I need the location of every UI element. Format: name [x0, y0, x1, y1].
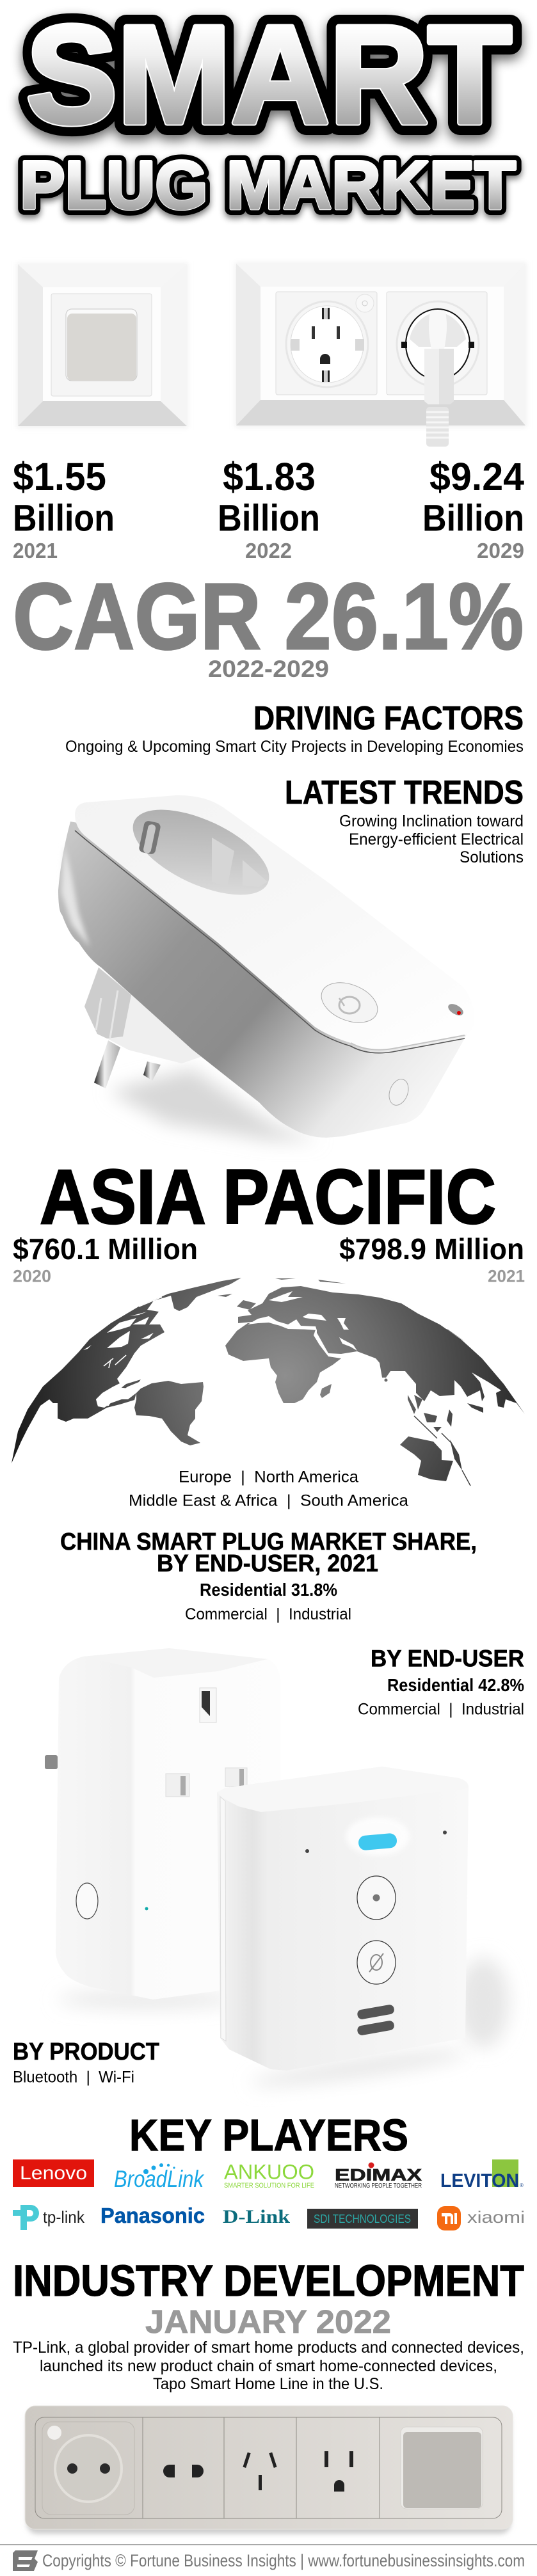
title: SMART PLUG MARKET: PLUG MARKET: [20, 147, 516, 223]
logo: TP-Link: [13, 2205, 85, 2230]
logo: Edimax: EDIMAX: [335, 2165, 422, 2184]
world map globe: [12, 1278, 525, 1486]
icon: double socket with plug: [235, 262, 527, 447]
text block: latest trends: Energy-efficient Electrical: [349, 831, 524, 848]
heading: China market share: CHINA SMART PLUG MARKET SHARE,: [60, 1529, 477, 1555]
stat: 2029 market size: $9.24: [429, 455, 524, 498]
stat: 2021 market size: $1.55: [13, 455, 106, 498]
image: UK-style smart plug: [45, 1648, 280, 2008]
text block: by end-user: Commercial | Industrial: [358, 1701, 524, 1719]
text block: by end-user: [358, 1646, 524, 1719]
icon: wall switch: [17, 263, 188, 428]
text block: development description: launched its new product chain of smart home-connected devices,: [40, 2357, 497, 2375]
logo: Panasonic: Panasonic: [100, 2204, 205, 2227]
text block: latest trends: Solutions: [460, 848, 524, 866]
text block: by end-user: BY END-USER: [371, 1646, 524, 1671]
stat: 2021 market size: [13, 455, 115, 562]
stat: 2029 market size: Billion: [422, 498, 524, 539]
logo: Lenovo: Lenovo: [20, 2163, 87, 2184]
text block: by product: BY PRODUCT: [13, 2039, 159, 2065]
logo: Leviton: ®: [520, 2182, 524, 2188]
stat: 2022 market size: [218, 455, 320, 562]
title: SMART PLUG MARKET: PLUG MARKET: [20, 147, 516, 223]
logo: D-Link: D-Link: [223, 2206, 290, 2227]
title: SMART PLUG MARKET: PLUG MARKET: [20, 150, 516, 227]
logo: SDI Technologies: [307, 2209, 418, 2229]
image: smart plug: [58, 792, 474, 1140]
text block: latest trends: [285, 774, 524, 866]
stat: Asia Pacific 2021: $798.9 Million: [339, 1232, 524, 1266]
stat: 2029 market size: 2029: [477, 539, 524, 562]
image: wall plate with sockets: [25, 2406, 513, 2534]
logo: Leviton: LEVITON: [440, 2170, 519, 2191]
text block: other regions: Europe | North America: [179, 1468, 358, 1486]
footer: [0, 2544, 537, 2571]
text block: by product: Bluetooth | Wi-Fi: [13, 2068, 134, 2086]
text block: other regions: [129, 1468, 408, 1510]
stat: Asia Pacific 2020: $760.1 Million: [13, 1232, 198, 1266]
heading: China market share: [60, 1529, 477, 1623]
text block: development description: TP-Link, a global provider of smart home products and connected devices,: [13, 2339, 524, 2357]
image: Echo Flex device: [217, 1767, 509, 2092]
logo: SDI Technologies: SDI TECHNOLOGIES: [314, 2213, 411, 2225]
title: SMART PLUG MARKET: [20, 0, 516, 227]
logo: BroadLink: BroadLink: [114, 2166, 205, 2192]
title: SMART PLUG MARKET: SMART: [26, 0, 511, 153]
stat: Asia Pacific 2021: [339, 1232, 525, 1286]
stat: 2022 market size: Billion: [218, 498, 320, 539]
stat: 2022 market size: $1.83: [223, 455, 316, 498]
heading: Asia Pacific: ASIA PACIFIC: [40, 1153, 496, 1240]
stat: Asia Pacific 2021: 2021: [488, 1267, 525, 1286]
stat: 2022 market size: 2022: [245, 539, 292, 562]
stat: Asia Pacific 2020: 2020: [13, 1267, 51, 1286]
text block: development description: Tapo Smart Home Line in the U.S.: [153, 2375, 383, 2393]
stat: 2021 market size: 2021: [13, 539, 58, 562]
text block: by product: [13, 2039, 159, 2086]
stat: 2021 market size: Billion: [13, 498, 115, 539]
text block: development description: [13, 2339, 524, 2393]
logo: Xiaomi: [437, 2206, 525, 2230]
logo: Edimax: [335, 2163, 422, 2190]
CAGR headline: 2022-2029: [208, 656, 329, 682]
logo: Ankuoo: ANKUOO: [224, 2160, 314, 2183]
logo: Edimax: NETWORKING PEOPLE TOGETHER: [335, 2182, 422, 2190]
stat: 2029 market size: [422, 455, 524, 562]
logo: Ankuoo: SMARTER SOLUTION FOR LIFE: [224, 2182, 314, 2190]
text block: by end-user: Residential 42.8%: [387, 1675, 524, 1695]
text block: latest trends: Growing Inclination toward: [339, 813, 524, 831]
text block: other regions: Middle East & Africa | South America: [129, 1492, 408, 1510]
title: SMART PLUG MARKET: SMART: [26, 0, 511, 153]
title: SMART PLUG MARKET: SMART: [26, 3, 511, 158]
heading: key players: KEY PLAYERS: [129, 2110, 408, 2160]
stat: Asia Pacific 2020: [13, 1232, 198, 1286]
heading: China market share: BY END-USER, 2021: [157, 1550, 378, 1577]
text block: driving factors: Ongoing & Upcoming Smart City Projects in Developing Economies: [65, 738, 524, 756]
logo: TP-Link: tp-link: [43, 2207, 85, 2227]
date: January 2022: JANUARY 2022: [145, 2303, 391, 2340]
logo: Xiaomi: xiaomi: [467, 2207, 525, 2227]
title: SMART PLUG MARKET: SMART: [26, 0, 511, 153]
logo: Lenovo: [13, 2159, 94, 2187]
logo: Leviton: [440, 2159, 524, 2191]
heading: China market share: Commercial | Industrial: [185, 1605, 351, 1623]
heading: China market share: Residential 31.8%: [200, 1580, 337, 1600]
text block: driving factors: [65, 700, 524, 756]
title: SMART PLUG MARKET: PLUG MARKET: [20, 147, 516, 223]
